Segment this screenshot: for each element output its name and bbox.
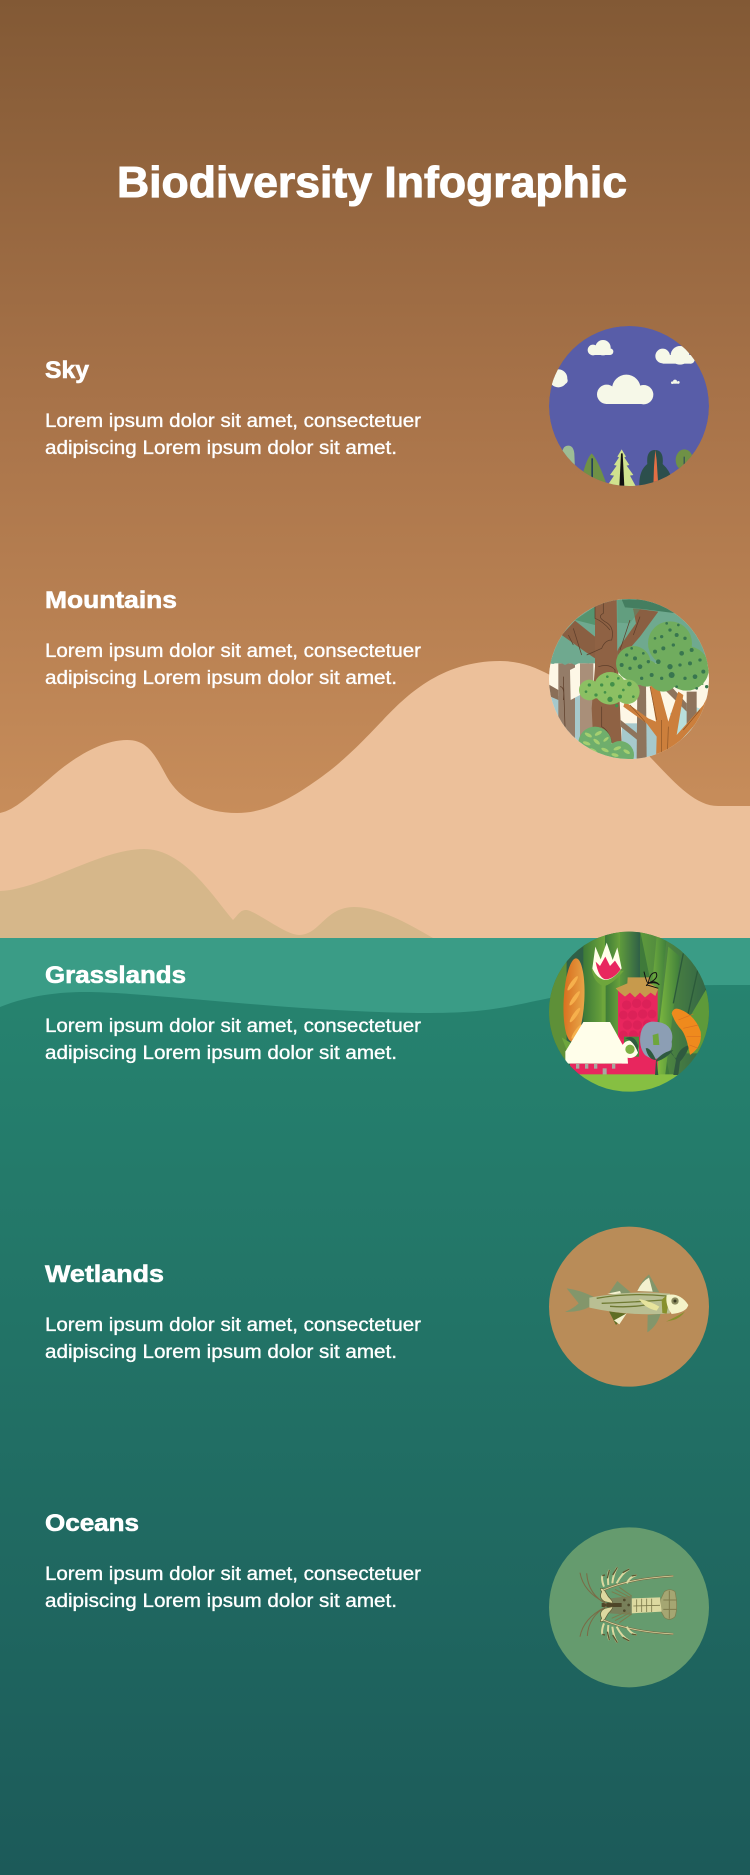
body text: oceans [45,1564,422,1612]
section: sky text [45,357,422,459]
section: grasslands text [45,962,422,1064]
background: sky gradient [0,0,750,940]
icon: sky scene with clouds and trees [548,326,709,487]
body text: oceans: adipiscing Lorem ipsum dolor sit amet. [45,1591,397,1612]
body text: grasslands: Lorem ipsum dolor sit amet, consectetuer [45,1016,422,1037]
icon: grassland still life [547,930,713,1098]
section: oceans text [45,1510,422,1612]
body text: sky: adipiscing Lorem ipsum dolor sit amet. [45,438,397,459]
background: shallow water band [0,938,750,1038]
body text: wetlands: adipiscing Lorem ipsum dolor sit amet. [45,1342,397,1363]
body text: sky: Lorem ipsum dolor sit amet, consectetuer [45,411,422,432]
background: near hills [0,849,433,938]
heading: mountains: Mountains [45,587,177,614]
body text: grasslands [45,1016,422,1064]
heading: oceans: Oceans [45,1510,139,1537]
body text: wetlands: Lorem ipsum dolor sit amet, consectetuer [45,1315,422,1336]
body text: sky [45,411,422,459]
icon: spiny lobster [549,1527,709,1687]
background: deep water [0,985,750,1875]
icon: forest scene [549,599,709,759]
body text: oceans: Lorem ipsum dolor sit amet, consectetuer [45,1564,422,1585]
icon: fish [549,1227,709,1387]
section: mountains text [45,587,422,689]
body text: grasslands: adipiscing Lorem ipsum dolor sit amet. [45,1043,397,1064]
title: Biodiversity Infographic [117,158,627,207]
body text: mountains [45,641,422,689]
background: far mountains [0,661,750,940]
body text: mountains: Lorem ipsum dolor sit amet, consectetuer [45,641,422,662]
section: wetlands text [45,1261,422,1363]
heading: grasslands: Grasslands [45,962,186,989]
heading: sky: Sky [45,357,90,384]
body text: mountains: adipiscing Lorem ipsum dolor sit amet. [45,668,397,689]
body text: wetlands [45,1315,422,1363]
heading: wetlands: Wetlands [45,1261,164,1288]
